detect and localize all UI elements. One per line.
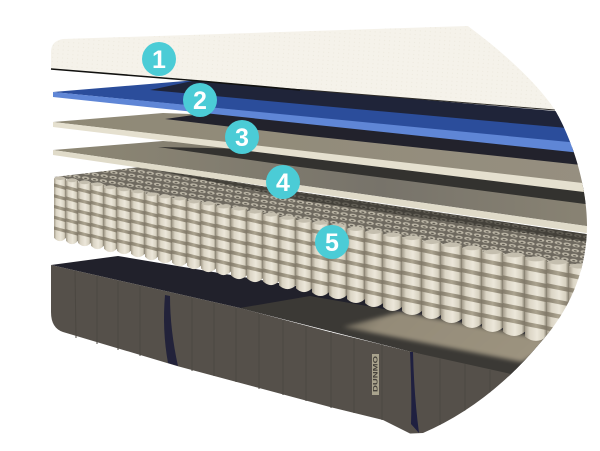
- handle seam right: [410, 352, 419, 433]
- badge 1: [142, 42, 176, 76]
- spring top shadow: [140, 167, 600, 244]
- badge 4: [266, 165, 300, 199]
- badge 5: 5: [325, 229, 339, 257]
- badge 1: 1: [152, 46, 166, 74]
- layer 3: foam: [53, 112, 600, 194]
- badge 2: [183, 83, 217, 117]
- handle seam left: [164, 295, 178, 366]
- layer 5: pocket springs: [54, 167, 600, 351]
- badge 5: [315, 225, 349, 259]
- badge 3: 3: [235, 124, 249, 152]
- base: fabric side panel: [51, 265, 511, 434]
- badge 2: 2: [193, 87, 207, 115]
- spring columns: [54, 176, 591, 351]
- layer 4: foam: [53, 141, 600, 235]
- brand label: DUNMO: [374, 355, 380, 392]
- layer 2: blue foam: [53, 80, 600, 155]
- base: top surface: [51, 256, 550, 376]
- layer 1: top foam: [50, 26, 555, 110]
- brand label: [372, 354, 380, 395]
- badge 4: 4: [276, 169, 290, 197]
- springs top surface: [54, 167, 600, 275]
- badge 3: [225, 120, 259, 154]
